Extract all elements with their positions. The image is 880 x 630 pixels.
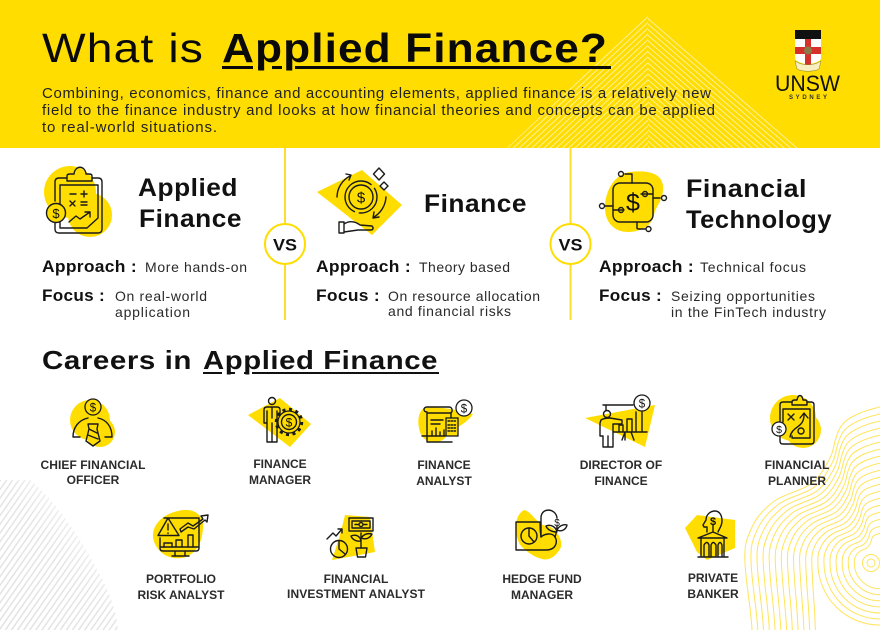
panel: applied finance <box>42 166 247 320</box>
career: director of finance <box>580 395 662 488</box>
focus: and financial risks <box>388 303 511 319</box>
career: financial investment analyst: FINANCIAL <box>324 572 388 586</box>
header chevron pattern <box>507 15 800 148</box>
career: financial planner: PLANNER <box>768 474 826 488</box>
approach: More hands-on <box>145 259 247 275</box>
career: portfolio risk analyst: RISK ANALYST <box>138 588 225 602</box>
careers heading: Applied Finance <box>203 345 438 375</box>
career: financial planner <box>765 395 829 488</box>
title: Applied Finance? <box>222 25 608 71</box>
career: finance analyst: ANALYST <box>416 474 472 488</box>
intro paragraph: field to the finance industry and looks at how financial theories and concepts can be applied <box>42 102 715 119</box>
intro paragraph <box>42 85 715 136</box>
focus: On real-world <box>115 288 207 304</box>
icon: head and bank: $ <box>710 516 716 528</box>
icon: report and calculator: $ <box>461 404 468 416</box>
vs badge 2 <box>550 224 590 264</box>
career: chief financial officer <box>40 399 146 487</box>
icon: monitor warning <box>153 510 208 558</box>
vs badge 2: VS <box>558 236 582 254</box>
focus: application <box>115 304 190 320</box>
intro paragraph: Combining, economics, finance and accounting elements, applied finance is a relatively new <box>42 85 711 102</box>
focus <box>42 286 207 320</box>
career: private banker <box>685 511 739 601</box>
career: finance manager: FINANCE <box>253 457 307 471</box>
vs badge 1: VS <box>273 236 297 254</box>
career: chief financial officer: OFFICER <box>67 473 120 487</box>
icon: presenter with chart: $ <box>639 398 646 410</box>
header band <box>0 0 880 148</box>
icon: money plant and pie <box>327 515 375 560</box>
focus <box>599 286 826 320</box>
vs badge 1 <box>265 224 305 264</box>
panel: applied finance: Finance <box>139 205 242 233</box>
contour decoration bottom right <box>745 407 880 630</box>
icon: clipboard calculator <box>44 166 112 237</box>
heading: Applied <box>138 174 238 202</box>
careers heading <box>42 345 439 375</box>
career: finance manager: MANAGER <box>249 473 311 487</box>
icon: clipboard calculator: $ <box>52 206 60 221</box>
career: financial investment analyst: INVESTMENT ANALYST <box>287 587 426 601</box>
icon: chart card and sprout: $ <box>554 518 560 529</box>
career: private banker: PRIVATE <box>688 571 738 585</box>
career: finance manager <box>248 398 311 487</box>
career: portfolio risk analyst: PORTFOLIO <box>146 572 216 586</box>
icon: coin cycle with hand <box>317 168 402 235</box>
title <box>42 25 611 71</box>
career: financial planner: FINANCIAL <box>765 458 829 472</box>
focus: Focus : <box>316 286 380 305</box>
icon: clipboard strategy: $ <box>776 424 782 436</box>
panel: financial technology <box>599 171 832 320</box>
career: private banker: BANKER <box>687 587 739 601</box>
career: finance analyst: FINANCE <box>417 458 471 472</box>
UNSW logo: UNSW <box>775 71 840 96</box>
career: director of finance: DIRECTOR OF <box>580 458 662 472</box>
intro paragraph: to real-world situations. <box>42 119 217 136</box>
icon: circuit dollar <box>600 171 666 232</box>
focus <box>316 286 540 319</box>
focus: Seizing opportunities <box>671 288 815 304</box>
focus: Focus : <box>42 286 105 305</box>
icon: executive tie: $ <box>90 402 97 414</box>
career: hedge fund manager: HEDGE FUND <box>502 572 582 586</box>
approach <box>599 257 806 276</box>
focus: On resource allocation <box>388 288 540 304</box>
focus: Focus : <box>599 286 662 305</box>
career: finance analyst <box>416 400 473 488</box>
UNSW logo <box>775 30 840 101</box>
career: director of finance: FINANCE <box>594 474 648 488</box>
heading: Finance <box>424 190 527 218</box>
title: What is <box>42 25 204 71</box>
career: financial investment analyst <box>287 515 426 601</box>
UNSW logo: SYDNEY <box>789 95 827 101</box>
approach: Theory based <box>419 259 510 275</box>
career: chief financial officer: CHIEF FINANCIAL <box>40 458 146 472</box>
panel: finance <box>316 168 540 319</box>
icon: coin cycle with hand: $ <box>357 190 366 206</box>
approach <box>316 257 510 276</box>
heading: Financial <box>686 175 807 203</box>
career: hedge fund manager: MANAGER <box>511 588 573 602</box>
approach: Approach : <box>42 257 137 276</box>
careers heading: Careers in <box>42 345 192 375</box>
panel: financial technology: Technology <box>686 206 832 234</box>
focus: in the FinTech industry <box>671 304 826 320</box>
approach: Technical focus <box>700 259 806 275</box>
career: portfolio risk analyst <box>138 510 225 602</box>
column dividers <box>285 148 570 320</box>
icon: circuit dollar: $ <box>626 189 640 217</box>
career: hedge fund manager <box>502 510 582 602</box>
approach: Approach : <box>599 257 694 276</box>
diagonal hatch decoration bottom left <box>0 480 118 630</box>
approach <box>42 257 247 276</box>
icon: person with gear: $ <box>286 416 293 430</box>
approach: Approach : <box>316 257 411 276</box>
